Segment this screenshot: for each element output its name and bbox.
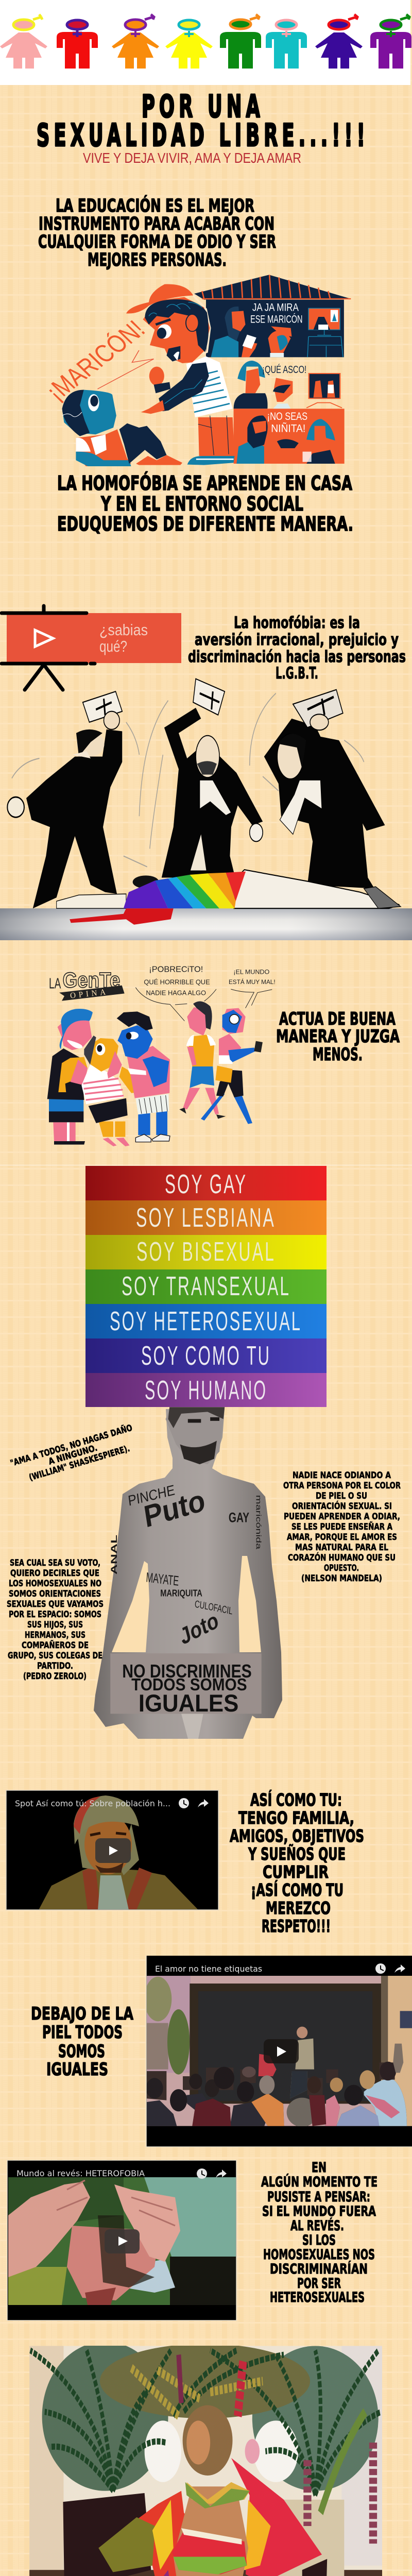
sign: no discrimines: IGUALES	[139, 1689, 238, 1717]
insults: PINCHE	[127, 1482, 176, 1510]
motion lines	[12, 693, 364, 867]
text block: debajo de la piel: DEBAJO DE LA	[31, 2004, 133, 2024]
icon: teal figure	[266, 20, 307, 69]
icon: share	[198, 1799, 209, 1807]
insults: ANAL	[110, 1535, 119, 1574]
band: soy humano: SOY HUMANO	[145, 1376, 267, 1405]
plants	[30, 2342, 381, 2544]
text block: mundo al reves: SI LOS	[302, 2232, 336, 2248]
presentation board: sabias que: ¿sabias	[99, 621, 148, 639]
house top panel: JA JA MIRA	[252, 301, 299, 313]
insults: MAYATE	[146, 1569, 179, 1589]
text block: mundo al reves: POR SER	[297, 2276, 341, 2292]
band: soy lesbiana	[85, 1200, 327, 1235]
video 3: mundo al reves heterofobia: Mundo al revés: HETEROFOBIA	[16, 2168, 145, 2178]
video 2: el amor no tiene etiquetas	[144, 1956, 412, 2147]
quote: pedro zerolo: COMPAÑEROS DE	[22, 1639, 89, 1651]
quote: nelson mandela: NADIE NACE ODIANDO A	[293, 1470, 391, 1481]
icon: clock	[197, 2168, 207, 2179]
icon: play button	[264, 2039, 299, 2063]
quote: pedro zerolo: SEXUALES QUE VAYAMOS	[7, 1599, 104, 1609]
text block: asi como tu: RESPETO!!!	[262, 1916, 331, 1936]
text block: asi como tu: MEREZCO	[266, 1898, 331, 1918]
icon: play button	[95, 1838, 131, 1863]
text block: mundo al reves: DISCRIMINARÍAN	[270, 2261, 368, 2277]
person: blue cap	[117, 1011, 170, 1142]
video 3: mundo al reves heterofobia	[7, 2160, 236, 2320]
icon: share	[216, 2170, 227, 2178]
rainbow banner: soy	[85, 1166, 327, 1407]
quote: shakespeare: (WILLIAM" SHASKESPIERE).	[28, 1444, 131, 1483]
presentation board: sabias que	[2, 606, 181, 690]
text block: homophobia definition	[188, 614, 406, 683]
text block: mundo al reves: HETEROSEXUALES	[270, 2290, 365, 2306]
person: tiger	[81, 1036, 140, 1146]
word: MARICON shout: ¡MARICÓN!	[40, 315, 151, 406]
icon: share	[394, 1964, 405, 1973]
plant pots	[63, 2493, 327, 2576]
text block: debajo de la piel: IGUALES	[46, 2059, 108, 2080]
band: soy transexual	[85, 1269, 327, 1304]
house top panel	[194, 275, 351, 357]
logo: la gente opina: LA	[49, 975, 61, 992]
middle panel: ¡QUÉ ASCO!	[262, 363, 306, 376]
icon: indigo figure	[315, 14, 363, 69]
sign: no discrimines: TODOS SOMOS	[131, 1675, 247, 1694]
sign: no discrimines	[110, 1653, 262, 1717]
video 1: spot asi como tu	[6, 1790, 218, 1910]
sign: no discrimines: NO DISCRIMINES	[122, 1660, 252, 1682]
icon: play button	[105, 2229, 140, 2253]
standing boy	[126, 284, 234, 465]
text block: debajo de la piel: PIEL TODOS	[42, 2022, 123, 2043]
insults: maricónida	[254, 1495, 263, 1550]
icon: orange figure	[112, 14, 159, 69]
crowd	[147, 2078, 407, 2126]
lower panel: NIÑITA!	[271, 422, 305, 434]
middle panel	[234, 361, 342, 409]
quote: shakespeare: A NINGUNO.	[47, 1443, 99, 1467]
text block: actua de buena manera: MENOS.	[313, 1044, 363, 1065]
quote: pedro zerolo: LOS HOMOSEXUALES NO	[9, 1579, 101, 1589]
icon: green figure	[220, 14, 261, 69]
quote: pedro zerolo: SOMOS ORIENTACIONES	[9, 1589, 101, 1599]
header band: rainbow people icons	[0, 0, 411, 85]
speech bubbles	[135, 965, 276, 1021]
illustration: men in suits beating a person with books	[0, 679, 412, 940]
quote: pedro zerolo: QUIERO DECIRLES QUE	[10, 1568, 99, 1579]
illustration: boy insulting another boy, learned at home	[40, 275, 351, 466]
text block: actua de buena manera	[276, 1009, 400, 1065]
text block: education: LA EDUCACIÓN ES EL MEJOR	[56, 195, 254, 216]
text block: education: MEJORES PERSONAS.	[88, 250, 227, 270]
photo: man with insults written on his torso	[94, 1407, 282, 1739]
text block: asi como tu: CUMPLIR	[263, 1862, 329, 1882]
house top panel: ESE MARICÓN	[250, 313, 303, 325]
text block: mundo al reves: AL REVÉS.	[290, 2217, 344, 2234]
text block: mundo al reves	[261, 2160, 377, 2306]
word: MARICON shout	[40, 315, 154, 406]
video scene	[147, 1976, 412, 2126]
text block: asi como tu: Y SUEÑOS QUE	[248, 1843, 346, 1864]
lower panel	[234, 409, 345, 464]
quote: nelson mandela: OPUESTO.	[324, 1563, 359, 1573]
icon: pink figure	[0, 14, 47, 69]
text block: homophobia definition: L.G.B.T.	[276, 664, 318, 683]
icon: purple figure	[370, 14, 411, 69]
quote: nelson mandela: (NELSON MANDELA)	[301, 1573, 382, 1584]
body silhouette	[94, 1409, 282, 1739]
subtitle: VIVE Y DEJA VIVIR, AMA Y DEJA AMAR	[83, 150, 301, 166]
text block: education: INSTRUMENTO PARA ACABAR CON	[39, 214, 274, 234]
man centre	[162, 679, 263, 878]
person: walking woman	[201, 1008, 263, 1124]
man left	[7, 691, 122, 908]
quote: pedro zerolo: POR EL ESPACIO: SOMOS	[9, 1609, 101, 1620]
text block: asi como tu: ¡ASÍ COMO TU	[251, 1879, 344, 1900]
video 1: spot asi como tu: Spot Así como tú: Sobre población h...	[15, 1799, 170, 1808]
band: soy humano	[85, 1373, 327, 1407]
insults: CULOFACIL	[194, 1598, 233, 1617]
icon: play triangle	[35, 630, 53, 647]
speech bubbles: ESTÁ MUY MAL!	[229, 978, 276, 986]
person: walking man	[179, 1002, 226, 1119]
icon: clock	[375, 1963, 386, 1974]
speech bubbles: ¡POBRECiTO!	[149, 965, 203, 974]
quote: nelson mandela	[283, 1470, 401, 1584]
band: soy lesbiana: SOY LESBIANA	[136, 1203, 276, 1233]
quote: pedro zerolo: SEA CUAL SEA SU VOTO,	[10, 1558, 100, 1568]
illustration: la gente opina	[47, 965, 276, 1146]
quote: pedro zerolo	[7, 1558, 104, 1682]
logo: la gente opina	[49, 968, 125, 1001]
text block: asi como tu	[230, 1789, 364, 1936]
band: soy transexual: SOY TRANSEXUAL	[122, 1272, 290, 1301]
text block: asi como tu: TENGO FAMILIA,	[238, 1808, 354, 1828]
icon: yellow figure	[165, 20, 213, 69]
band: soy como tu: SOY COMO TU	[141, 1341, 271, 1371]
speech bubbles: NADIE HAGA ALGO	[146, 989, 206, 997]
band: soy heterosexual	[85, 1304, 327, 1338]
logo: la gente opina: OPINA	[70, 988, 109, 1001]
victim with rainbow shirt	[57, 870, 401, 925]
lying boy	[62, 390, 182, 466]
band: soy bisexual	[85, 1235, 327, 1269]
lower panel: ¡NO SEAS	[267, 410, 307, 422]
title: POR UNA	[142, 89, 264, 125]
logo: la gente opina: GenTe	[63, 968, 120, 992]
text block: homophobia definition: La homofóbia: es la	[234, 614, 360, 632]
quote: pedro zerolo: SUS HIJOS, SUS	[27, 1620, 83, 1630]
insults: Joto	[178, 1607, 221, 1650]
quote: pedro zerolo: HERMANOS, SUS	[25, 1630, 85, 1640]
quote: shakespeare: "AMA A TODOS, NO HAGAS DAÑO	[9, 1421, 133, 1469]
quote: pedro zerolo: PARTIDO.	[37, 1661, 73, 1671]
insults: GAY	[229, 1510, 249, 1525]
band: soy gay	[85, 1166, 327, 1200]
performers	[259, 2054, 277, 2076]
text block: homophobia is learned	[57, 472, 353, 535]
band: soy bisexual: SOY BISEXUAL	[136, 1237, 276, 1267]
icon: clock	[179, 1798, 189, 1808]
head	[165, 1407, 225, 1464]
quote: shakespeare	[9, 1421, 139, 1487]
room background	[29, 2346, 383, 2576]
insults: MARIQUITA	[160, 1588, 202, 1599]
quote: pedro zerolo: (PEDRO ZEROLO)	[23, 1671, 87, 1682]
icon: red figure	[57, 20, 98, 69]
man right	[264, 690, 385, 889]
band: soy gay: SOY GAY	[165, 1170, 247, 1199]
quote: pedro zerolo: GRUPO, SUS COLEGAS DE	[8, 1651, 102, 1661]
video 2: el amor no tiene etiquetas: El amor no tiene etiquetas	[155, 1964, 262, 1974]
text block: education: CUALQUIER FORMA DE ODIO Y SER	[38, 232, 276, 252]
photo: dancer in rainbow outfit	[29, 2342, 383, 2576]
quote: nelson mandela: MAS NATURAL PARA EL	[295, 1543, 388, 1553]
text block: mundo al reves: EN	[312, 2160, 327, 2176]
speech bubbles: QUÉ HORRIBLE QUE	[144, 978, 210, 986]
text block: debajo de la piel	[31, 2004, 133, 2080]
floor	[0, 908, 412, 940]
speech bubbles: ¡EL MUNDO	[233, 969, 269, 976]
quote: nelson mandela: DE PIEL O SU	[316, 1491, 367, 1501]
presentation board: sabias que: qué?	[99, 637, 127, 655]
cape	[98, 2458, 322, 2576]
title	[37, 89, 369, 154]
insults	[110, 1482, 263, 1650]
text block: education	[38, 195, 276, 270]
insults: Puto	[142, 1483, 208, 1534]
text block: debajo de la piel: SOMOS	[58, 2041, 105, 2062]
person: blue hair	[47, 1009, 93, 1145]
text block: homophobia is learned: Y EN EL ENTORNO SOCIAL	[100, 493, 303, 515]
band: soy como tu	[85, 1338, 327, 1373]
text block: asi como tu: ASÍ COMO TU:	[250, 1789, 342, 1810]
dancer	[172, 2405, 260, 2576]
